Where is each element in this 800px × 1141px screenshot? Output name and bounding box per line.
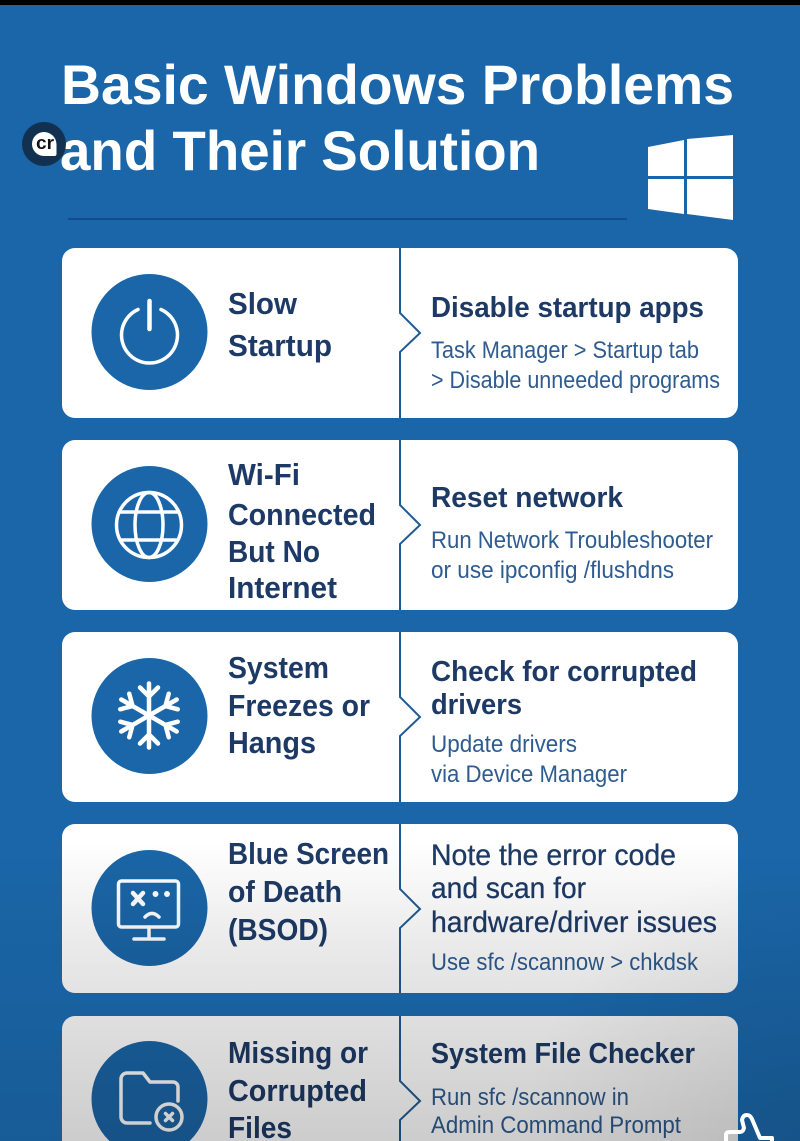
solution: system file checker: Admin Command Prompt xyxy=(431,1112,681,1139)
solution: disable startup apps xyxy=(431,292,720,394)
problem: system freezes or hangs xyxy=(228,650,370,760)
icon: snowflake xyxy=(117,684,181,748)
icon: creator badge xyxy=(22,122,66,166)
problem: system freezes or hangs: Hangs xyxy=(228,725,316,760)
problem: wi-fi connected but no internet: Wi-Fi xyxy=(228,457,300,492)
solution: reset network xyxy=(431,482,713,584)
problem: wi-fi connected but no internet xyxy=(228,457,376,605)
solution: system file checker: Run sfc /scannow in xyxy=(431,1084,629,1111)
solution: check corrupted drivers: Update drivers xyxy=(431,731,577,758)
problem: blue screen of death: (BSOD) xyxy=(228,912,328,947)
panel: system freezes xyxy=(62,632,738,802)
icon: globe xyxy=(116,492,182,558)
problem: blue screen of death: Blue Screen xyxy=(228,836,389,871)
problem: wi-fi connected but no internet: Internet xyxy=(228,570,337,605)
solution: note error code and scan: Note the error code xyxy=(431,839,676,872)
problem: wi-fi connected but no internet: Connected xyxy=(228,497,376,532)
problem: missing or corrupted files xyxy=(228,1035,368,1141)
icon: windows logo xyxy=(648,135,733,220)
solution: check corrupted drivers xyxy=(431,656,697,788)
problem: system freezes or hangs: System xyxy=(228,650,329,685)
solution: note error code and scan: hardware/driver issues xyxy=(431,906,717,939)
solution: reset network: Run Network Troubleshooter xyxy=(431,527,713,554)
panel: missing or corrupted files xyxy=(62,1016,738,1141)
problem: blue screen of death: of Death xyxy=(228,874,342,909)
solution: note error code and scan: and scan for xyxy=(431,872,586,905)
problem: slow startup xyxy=(228,286,332,363)
panel: slow startup xyxy=(62,248,738,418)
panel: wi-fi no internet xyxy=(62,440,738,610)
problem: missing or corrupted files: Corrupted xyxy=(228,1073,367,1108)
solution: system file checker: System File Checker xyxy=(431,1038,695,1070)
solution: reset network: or use ipconfig /flushdns xyxy=(431,557,674,584)
problem: slow startup: Slow xyxy=(228,286,298,321)
title: and Their Solution xyxy=(60,119,540,182)
panel: blue screen of death xyxy=(62,824,738,993)
problem: slow startup: Startup xyxy=(228,328,332,363)
solution: system file checker xyxy=(431,1038,695,1139)
title: Basic Windows Problems xyxy=(61,53,734,116)
icon: crashed monitor xyxy=(118,881,178,939)
solution: check corrupted drivers: via Device Manager xyxy=(431,761,627,788)
solution: note error code and scan xyxy=(431,839,717,976)
solution: reset network: Reset network xyxy=(431,482,624,514)
solution: disable startup apps: Disable startup apps xyxy=(431,292,704,324)
title xyxy=(60,53,734,182)
solution: check corrupted drivers: drivers xyxy=(431,689,522,721)
solution: note error code and scan: Use sfc /scannow > chkdsk xyxy=(431,949,699,976)
icon: cursor star xyxy=(726,1115,772,1141)
icon: power xyxy=(122,301,178,363)
problem: blue screen of death xyxy=(228,836,389,947)
icon: folder with x xyxy=(121,1073,182,1130)
problem: wi-fi connected but no internet: But No xyxy=(228,534,320,569)
icon: creator badge: cr xyxy=(36,133,54,153)
solution: disable startup apps: > Disable unneeded programs xyxy=(431,367,720,394)
problem: missing or corrupted files: Missing or xyxy=(228,1035,368,1070)
problem: system freezes or hangs: Freezes or xyxy=(228,688,370,723)
solution: disable startup apps: Task Manager > Startup tab xyxy=(431,337,699,364)
solution: check corrupted drivers: Check for corrupted xyxy=(431,656,697,688)
